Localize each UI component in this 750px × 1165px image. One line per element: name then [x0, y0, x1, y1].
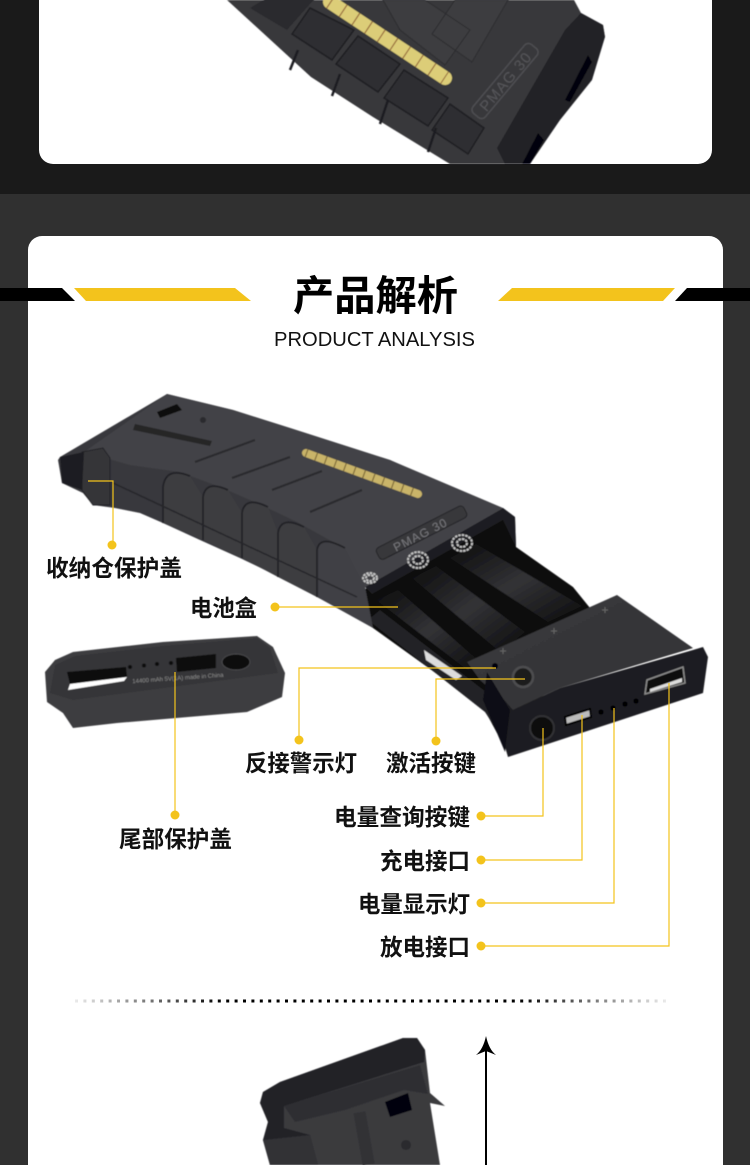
base plate: [497, 13, 605, 164]
end cap front face: [493, 647, 708, 757]
callout: storage cover: 收纳仓保护盖: [46, 555, 182, 581]
callout: level indicator lights: 电量显示灯: [358, 891, 470, 917]
tray side rail: [368, 610, 500, 735]
callout: charge query button: [334, 728, 543, 830]
grip lumps: [250, 0, 318, 30]
callout: tail cover: 尾部保护盖: [119, 826, 232, 852]
window: [330, 2, 445, 78]
callout: charging port: 充电接口: [380, 848, 470, 874]
grip lumps: [163, 473, 203, 540]
callout: discharge port: 放电接口: [380, 934, 470, 960]
springs: [363, 535, 472, 583]
upper panels: [383, 0, 508, 65]
photo: tail protective cover: [45, 636, 285, 728]
panel: top product photo: [39, 0, 712, 164]
magazine body: [58, 394, 516, 628]
callout: storage cover: [46, 481, 182, 581]
tray: [360, 512, 620, 733]
model marking: [375, 505, 468, 561]
panel: product analysis: [0, 236, 750, 1165]
photo: tail protective cover: 14400 mAh 5V(1A) made in China: [132, 673, 224, 685]
storage cover: [82, 448, 110, 505]
photo: magazine with battery tray: [58, 394, 708, 757]
callout: charging port: [380, 715, 582, 874]
header ribbon: [0, 288, 750, 301]
top slot: [157, 404, 182, 418]
led dots: [598, 698, 639, 715]
micro usb: [565, 709, 591, 725]
photo: magazine top view: [260, 1038, 445, 1165]
callout: tail cover: [119, 672, 232, 852]
callout: activate button: [386, 679, 525, 776]
usb port: [645, 667, 685, 694]
model marking: PMAG 30: [476, 49, 536, 115]
subheading: PRODUCT ANALYSIS: [274, 329, 475, 351]
callout: level indicator lights: [358, 708, 614, 917]
top band background: [0, 0, 750, 194]
warning led: [492, 663, 498, 669]
callout: battery box: 电池盒: [190, 595, 257, 621]
callout: battery box: [190, 595, 398, 621]
callout: reverse warning light: [245, 668, 496, 776]
query button: [530, 716, 554, 740]
release slot: [424, 650, 462, 680]
panel grooves: [195, 440, 362, 512]
callout: activate button: 激活按键: [386, 750, 476, 776]
rim: [365, 508, 516, 594]
heading: 产品解析: [293, 273, 458, 319]
polarity marks: [500, 607, 608, 654]
callout: discharge port: [380, 683, 669, 960]
arrow: up: [476, 1036, 496, 1165]
callout: reverse warning light: 反接警示灯: [245, 750, 357, 776]
end cap top face: [467, 595, 693, 710]
activate button: [513, 667, 533, 687]
photo: magazine bottom end: [227, 0, 605, 164]
callout: charge query button: 电量查询按键: [334, 804, 470, 830]
feed window: [306, 453, 418, 494]
battery channels: [376, 590, 480, 672]
model marking: PMAG 30: [391, 515, 450, 555]
